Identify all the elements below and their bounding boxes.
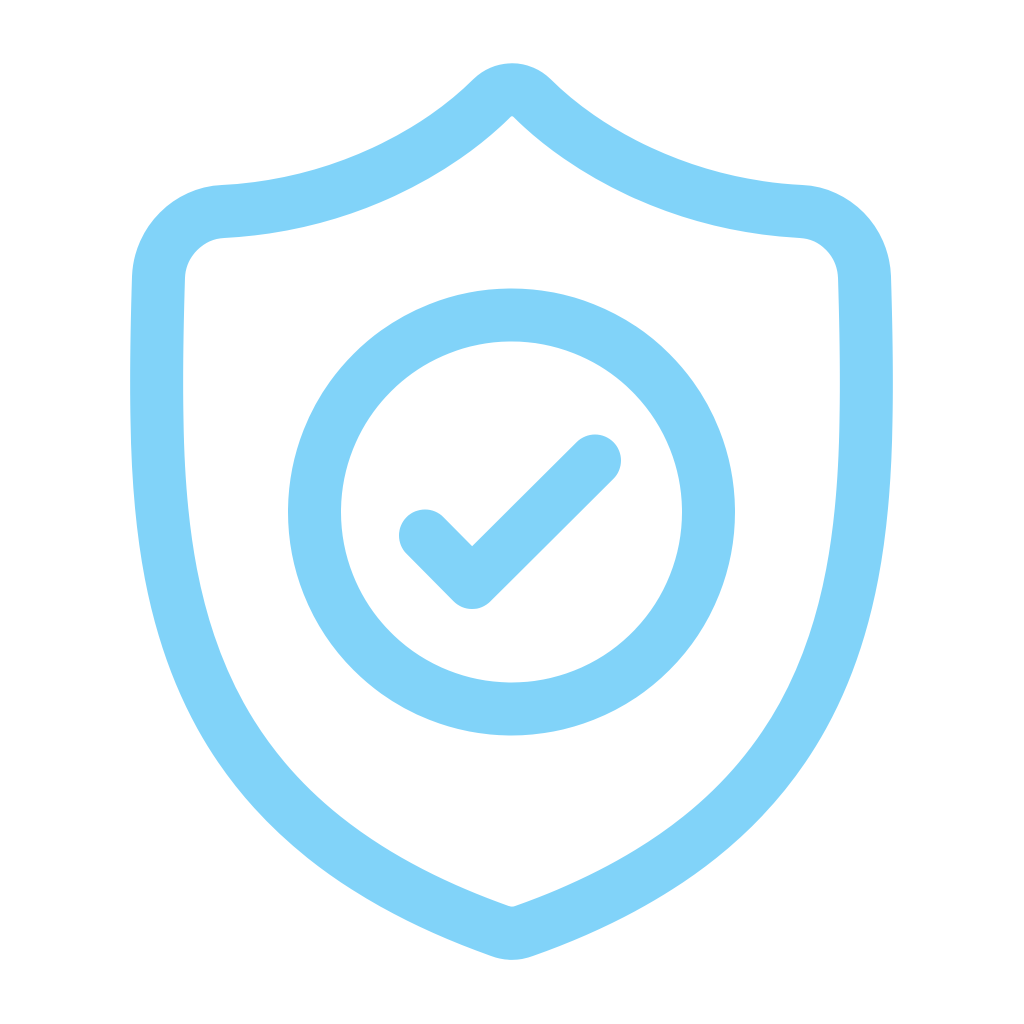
check mark bbox=[425, 460, 595, 583]
shield outline bbox=[157, 90, 866, 933]
inner circle bbox=[314, 315, 708, 709]
